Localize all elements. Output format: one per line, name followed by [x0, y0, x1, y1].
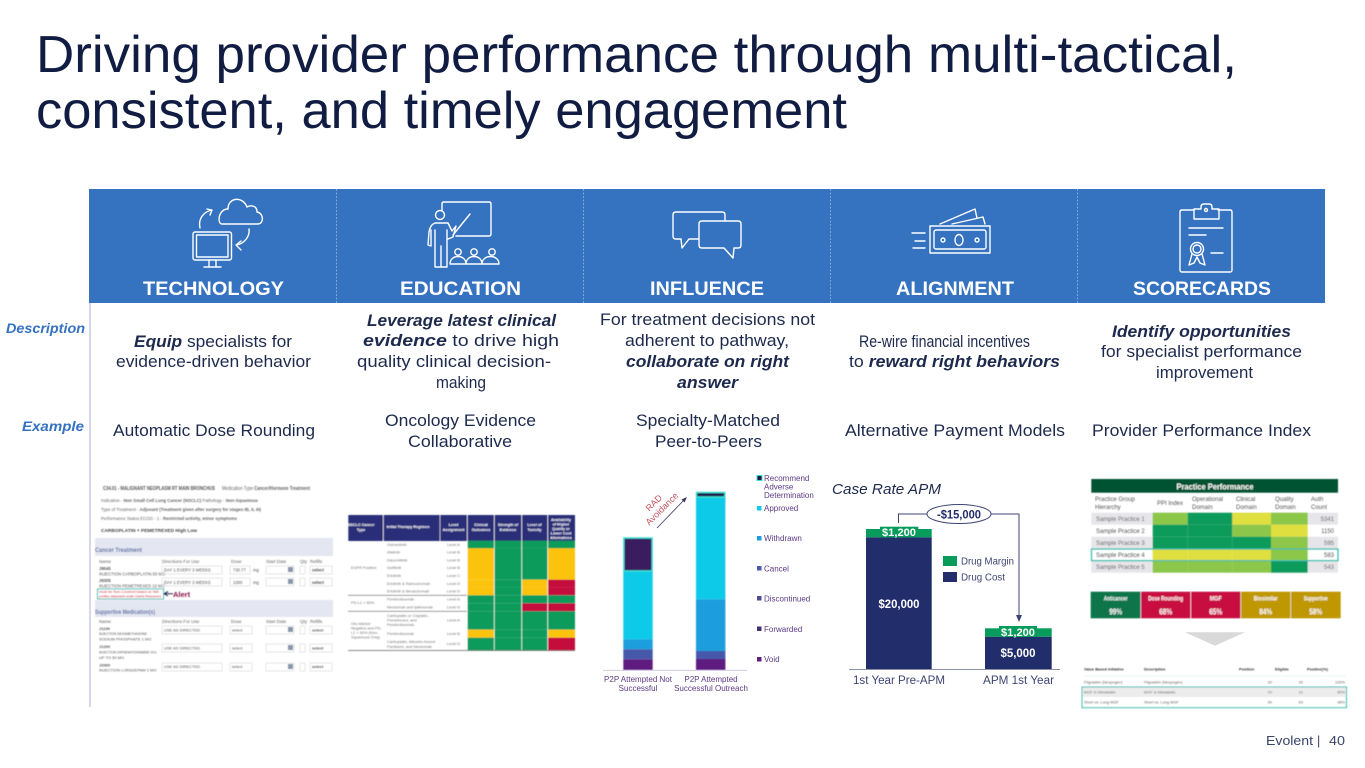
panel: dose rounding form: Name — [99, 619, 112, 624]
panel: dose rounding form: Qty — [300, 559, 308, 564]
panel: dose rounding form: DAY 1 EVERY 3 WEEKS — [164, 568, 211, 572]
panel: dose rounding form: Medication Type Cancer/Hormone Treatment — [222, 486, 310, 492]
row labels: Example — [22, 418, 84, 434]
axis labels — [853, 675, 1054, 687]
panel: dose rounding form: INJECTION LORAZEPAM 2 MG — [99, 668, 156, 672]
panel: dose rounding form: CARBOPLATIN + PEMETREXED High Low — [101, 528, 197, 534]
example titles: Specialty-Matched — [636, 411, 780, 430]
panel: dose rounding form: select — [232, 646, 243, 650]
footer: brand and page number: | — [1317, 734, 1320, 748]
example titles: Automatic Dose Rounding — [113, 421, 315, 440]
panel: oncology evidence table: Level of — [527, 523, 542, 527]
practice performance table: PPI Index — [1157, 501, 1183, 507]
value based initiative table: Eligible — [1275, 666, 1290, 672]
panel: dose rounding form: Start Date — [266, 619, 287, 624]
panel: dose rounding form: USE AS DIRECTED — [164, 628, 200, 632]
value based initiative table: Description — [1144, 666, 1166, 672]
panel: dose rounding form: select — [312, 664, 324, 669]
practice performance table: 1150 — [1321, 529, 1335, 535]
description: influence: For treatment decisions not — [600, 310, 815, 329]
practice performance table: Sample Practice 4 — [1096, 553, 1145, 559]
panel: oncology evidence table: Nivolumab and Ipilimumab — [387, 604, 433, 610]
panel: dose rounding form: J1200 — [99, 644, 111, 649]
panel: provider performance index — [1082, 479, 1346, 708]
panel: oncology evidence table: Alternatives — [550, 536, 572, 540]
column headings — [143, 279, 1271, 300]
value based initiative table: Short vs. Long MGF — [1084, 700, 1119, 704]
panel: oncology evidence table: Level C — [447, 573, 460, 578]
bar: not successful — [623, 538, 653, 670]
domain score tiles: Supportive — [1304, 596, 1328, 602]
domain score tiles: Biosimilar — [1254, 596, 1278, 602]
value based initiative table: MGF in Metastatic — [1144, 690, 1176, 694]
value based initiative table: Position — [1239, 666, 1255, 672]
practice performance table: Sample Practice 3 — [1096, 541, 1145, 547]
panel: oncology evidence table: Pembrolizumab — [387, 631, 414, 636]
footer: brand and page number: Evolent — [1266, 734, 1314, 748]
icon: education — [428, 202, 499, 267]
axis labels: APM 1st Year — [983, 675, 1054, 687]
axis labels: Successful — [619, 684, 658, 693]
practice performance table: Operational — [1192, 497, 1223, 503]
evidence heat cells — [467, 541, 575, 650]
panel: dose rounding form: USE AS DIRECTED — [164, 646, 200, 650]
panel: oncology evidence table: Gefitinib — [387, 565, 401, 570]
practice performance table: Count — [1311, 505, 1327, 511]
panel: oncology evidence table: Erlotinib & Bevacizumab — [387, 588, 429, 594]
panel: oncology evidence table: Paclitaxel, and Nivolumab — [387, 644, 432, 649]
practice performance table: Clinical — [1236, 497, 1255, 503]
icon: influence — [673, 212, 741, 258]
description: scorecards: Identify opportunities — [1112, 322, 1291, 341]
panel: dose rounding form: INJECTION DEXAMETHASONE — [99, 631, 147, 636]
panel: dose rounding form: Supportive Medication(s) — [95, 610, 155, 616]
header band — [89, 189, 1325, 303]
panel: oncology evidence table: Toxicity — [527, 528, 542, 532]
panel: oncology evidence table: Level D — [447, 581, 460, 586]
panel: oncology evidence table: Negative and PD- — [351, 626, 382, 630]
example titles: Oncology Evidence — [385, 411, 536, 430]
panel: dose rounding form: select — [312, 568, 324, 572]
RAD avoidance arrow: RAD — [644, 492, 664, 513]
description: influence: adherent to pathway, — [625, 331, 789, 350]
example titles: Peer-to-Peers — [655, 432, 762, 451]
panel: dose rounding form: 1000 — [233, 580, 243, 585]
panel: dose rounding form: Performance Status ECOG - 1 - Restricted activity, minor symptoms — [101, 516, 237, 522]
panel: oncology evidence table: NSCLC Cancer — [347, 523, 375, 527]
value based initiative table: Value Based Initiative — [1084, 666, 1125, 672]
legend — [757, 474, 814, 664]
domain score tiles: MGF — [1210, 596, 1222, 602]
practice performance table: Domain — [1275, 505, 1296, 511]
axis labels: 1st Year Pre-APM — [853, 675, 945, 687]
panel: oncology evidence table: Oto-Marker — [351, 621, 371, 626]
practice performance table: Sample Practice 1 — [1096, 517, 1145, 523]
value based initiative table: 30 — [1299, 680, 1304, 684]
example titles: Provider Performance Index — [1092, 421, 1312, 440]
practice performance table: Practice Performance — [1176, 482, 1254, 492]
column headings: SCORECARDS — [1133, 279, 1271, 300]
panel: dose rounding form: Name — [99, 559, 112, 564]
panel: dose rounding form: SODIUM PHOSPHATE 1 MG — [99, 636, 151, 642]
panel: oncology evidence table: Level D — [447, 604, 460, 610]
panel: dose rounding form: Refills — [310, 619, 323, 624]
panel: oncology evidence table: Lower Cost — [551, 532, 572, 536]
legend: Approved — [764, 504, 798, 513]
description: scorecards — [1101, 322, 1302, 382]
bar: APM year: $5,000 — [1000, 648, 1036, 660]
value based initiative table: Filgrastim (Neupogen) — [1084, 680, 1123, 684]
practice performance table: Practice Group — [1095, 497, 1136, 503]
practice performance table: Quality — [1275, 497, 1294, 503]
icon: alignment — [912, 209, 990, 253]
panel: dose rounding form: 730.77 — [233, 568, 246, 572]
savings callout arrow — [898, 504, 1022, 622]
panel: oncology evidence table: Outcomes — [472, 528, 490, 532]
bar: pre-APM — [866, 527, 932, 669]
panel: oncology evidence table: Carboplatin, Albumin-bound — [387, 639, 435, 644]
panel: oncology evidence table: Afatinib — [387, 550, 400, 554]
panel: dose rounding form: J9045 — [99, 566, 111, 571]
panel: dose rounding form: profiles statement under Useful Resources — [99, 594, 161, 598]
panel: dose rounding form: INJECTION DIPHENHYDRAMINE HCL — [99, 650, 158, 654]
RAD avoidance arrow: Avoidance — [644, 491, 680, 527]
panel: dose rounding form: DAY 1 EVERY 3 WEEKS — [164, 580, 211, 585]
panel: oncology evidence table: Pembrolizumab — [387, 622, 414, 627]
panel: oncology evidence table: Level A — [447, 542, 460, 547]
bar: APM year — [985, 626, 1052, 669]
panel: dose rounding form: Start Date — [266, 559, 287, 564]
column headings: ALIGNMENT — [896, 279, 1014, 300]
value based initiative table — [1082, 666, 1346, 708]
domain score tiles: Anticancer — [1104, 596, 1128, 602]
description: education: making — [436, 373, 486, 392]
panel: oncology evidence table: Level D — [447, 588, 460, 594]
panel: oncology evidence table: EGFR Positive — [351, 565, 377, 570]
panel: oncology evidence table: Assignment — [443, 528, 465, 532]
practice performance table: 583 — [1324, 553, 1335, 559]
panel: dose rounding form: J2060 — [99, 662, 111, 668]
panel: oncology evidence table: Level B — [447, 631, 460, 636]
panel: dose rounding form: must be Non-Covered based on NIA — [99, 590, 159, 594]
panel: dose rounding form: USE AS DIRECTED — [164, 664, 200, 669]
panel: oncology evidence table: Osimertinib — [387, 542, 407, 547]
description: technology: Equip specialists for — [134, 332, 292, 351]
description: education: quality clinical decision- — [357, 352, 551, 371]
legend: Recommend — [764, 474, 809, 483]
description: alignment: to reward right behaviors — [849, 352, 1060, 371]
description: education — [357, 311, 559, 392]
panel: oncology evidence table: Level B — [447, 550, 460, 554]
practice performance table: Auth — [1311, 497, 1323, 503]
panel: oncology evidence table: Level — [449, 523, 458, 527]
panel: oncology evidence table: Level A — [447, 618, 460, 622]
panel: oncology evidence table: Level B — [447, 558, 460, 562]
panel: case rate APM chart — [832, 481, 1060, 687]
legend: Drug Cost — [961, 572, 1005, 584]
legend: Adverse — [764, 482, 794, 492]
column headings: TECHNOLOGY — [143, 279, 284, 300]
practice performance table: Hierarchy — [1095, 505, 1121, 511]
panel: dose rounding form: J1100 — [99, 626, 111, 631]
panel: dose rounding form: Type of Treatment - Adjuvant (Treatment given after surgery for stages IB, II, III) — [101, 507, 261, 513]
practice performance table: Domain — [1192, 505, 1213, 511]
legend: Discontinued — [764, 594, 810, 604]
title — [36, 26, 1237, 140]
value based initiative table: 30 — [1268, 680, 1273, 684]
panel: dose rounding form: select — [232, 664, 243, 669]
description: influence — [600, 310, 815, 392]
panel: dose rounding form: Dose — [231, 559, 242, 564]
column headings: INFLUENCE — [650, 279, 764, 300]
panel: oncology evidence table: of Higher — [553, 522, 570, 526]
axis labels — [604, 675, 748, 693]
description: education: Leverage latest clinical — [367, 311, 557, 330]
panel: oncology evidence table: Type — [357, 528, 365, 532]
value based initiative table: MGF in Metastatic — [1084, 690, 1116, 694]
panel: oncology evidence table: Clinical — [474, 523, 488, 527]
panel: dose rounding form: INJECTION PEMETREXED 10 MG — [99, 584, 165, 588]
panel: dose rounding form: C34.01 - MALIGNANT NEOPLASM RT MAIN BRONCHUS — [103, 486, 216, 492]
panel: oncology evidence table: Erlotinib — [387, 573, 401, 578]
footer: brand and page number: 40 — [1329, 734, 1345, 748]
icon: scorecards — [1180, 204, 1232, 272]
panel: oncology evidence table: L1 > 50% (Non- — [351, 630, 379, 635]
panel: oncology evidence table: Level B — [447, 565, 460, 570]
description: technology — [116, 332, 311, 371]
practice performance table: Domain — [1236, 505, 1257, 511]
value based initiative table: Filgrastim (Neupogen) — [1144, 680, 1183, 684]
panel: oncology evidence table: Availability — [551, 518, 572, 522]
example titles: Collaborative — [408, 432, 512, 451]
footer: brand and page number — [1266, 734, 1345, 748]
panel: dose rounding form: Alert — [173, 590, 191, 599]
panel: oncology evidence table: Initial Therapy Regimen — [387, 525, 430, 529]
panel: dose rounding form: Indication - Non Small Cell Lung Cancer (NSCLC) Pathology - Non-Squamous — [101, 498, 258, 504]
bar: pre-APM: $20,000 — [878, 599, 920, 611]
value based initiative table: 31 — [1299, 690, 1303, 694]
legend: Void — [764, 655, 780, 664]
chart subtitle: Case Rate APM — [832, 481, 941, 498]
axis labels: P2P Attempted Not — [604, 675, 673, 684]
savings callout arrow: -$15,000 — [937, 510, 981, 522]
panel: dose rounding form: INJECTION CARBOPLATIN 50 MG — [99, 572, 165, 576]
value based initiative table: Positive(%) — [1307, 666, 1329, 672]
practice performance table: 5341 — [1321, 517, 1335, 523]
panel: peer-to-peer stacked bar chart — [603, 474, 814, 693]
domain score tiles: 68% — [1159, 606, 1173, 616]
practice performance table: Sample Practice 2 — [1096, 529, 1145, 535]
domain score tiles: Dose Rounding — [1148, 596, 1183, 602]
panel: dose rounding form: select — [312, 628, 324, 632]
row labels: Description — [6, 320, 85, 336]
domain score tiles: 65% — [1209, 606, 1223, 616]
legend: Cancel — [764, 564, 789, 574]
description: alignment: Re-wire financial incentives — [859, 332, 1030, 351]
panel: oncology evidence table: Squamous Only) — [351, 634, 381, 640]
description: influence: collaborate on right — [626, 352, 790, 371]
practice performance table: 543 — [1324, 565, 1335, 571]
value based initiative table: 100% — [1335, 680, 1346, 684]
column headings: EDUCATION — [400, 279, 521, 300]
legend — [943, 556, 1014, 584]
panel: dose rounding form: Qty — [300, 619, 308, 624]
description: influence: answer — [677, 373, 739, 392]
icon: technology — [193, 199, 262, 267]
drill-down triangle — [1185, 632, 1245, 646]
panel: dose rounding form: Dose — [231, 619, 242, 624]
panel: dose rounding form: Refills — [310, 559, 323, 564]
panel: dose rounding form: select — [312, 646, 324, 650]
value based initiative table: 20 — [1268, 690, 1273, 694]
description: scorecards: for specialist performance — [1101, 342, 1302, 361]
legend: Determination — [764, 491, 814, 500]
practice performance table — [1091, 479, 1338, 573]
panel: dose rounding form: UP TO 50 MG — [99, 655, 124, 660]
panel: oncology evidence table: Pemetrexed, and — [387, 618, 417, 622]
domain score tiles: 99% — [1109, 606, 1123, 616]
panel: dose rounding form: J9305 — [99, 578, 111, 583]
value based initiative table: Short vs. Long MGF — [1144, 700, 1179, 704]
legend: Drug Margin — [961, 556, 1014, 568]
legend: Withdrawn — [764, 534, 802, 543]
title: consistent, and timely engagement — [36, 82, 848, 140]
panel: dose rounding form: mg — [253, 580, 259, 585]
panel: dose rounding form: Directions For Use — [162, 559, 200, 564]
value based initiative table: 30 — [1268, 700, 1273, 704]
bar: pre-APM: $1,200 — [882, 527, 916, 539]
description: technology: evidence-driven behavior — [116, 352, 311, 371]
value based initiative table: 65% — [1337, 690, 1346, 694]
axis labels: Successful Outreach — [674, 684, 748, 693]
row labels — [6, 320, 85, 434]
left rule — [89, 303, 91, 707]
panel: oncology evidence table: PD-L1 > 50% — [351, 600, 375, 605]
title: Driving provider performance through multi-tactical, — [36, 26, 1237, 84]
axis labels: P2P Attempted — [684, 675, 738, 684]
panel: dose rounding form: select — [312, 580, 324, 585]
panel: oncology evidence table: Quality or — [552, 527, 570, 531]
panel: oncology evidence table: Pembrolizumab — [387, 596, 414, 602]
panel: dose rounding form: Cancer Treatment — [95, 548, 142, 554]
value based initiative table: 63 — [1299, 700, 1303, 704]
example titles — [113, 411, 1312, 451]
panel: oncology evidence table: Level D — [447, 641, 460, 646]
practice performance table: Sample Practice 5 — [1096, 565, 1145, 571]
bar: APM year: $1,200 — [1001, 627, 1035, 639]
description: scorecards: improvement — [1156, 363, 1253, 382]
legend: Forwarded — [764, 625, 802, 634]
domain score tiles: 84% — [1259, 606, 1273, 616]
panel: dose rounding form: mg — [253, 568, 259, 572]
panel: oncology evidence table: Carboplatin or Cisplatin, — [387, 613, 429, 618]
panel: oncology evidence table: Erlotinib & Ramucirumab — [387, 581, 430, 586]
panel: dose rounding form: Directions For Use — [162, 619, 200, 624]
description: education: evidence to drive high — [363, 331, 559, 350]
panel: oncology evidence table: Strength of — [498, 523, 519, 527]
domain score tiles — [1091, 592, 1341, 618]
panel: oncology evidence table — [347, 515, 575, 650]
panel: oncology evidence table: Level A — [447, 596, 460, 602]
panel: oncology evidence table: Dacomitinib — [387, 558, 407, 562]
panel: dose rounding form: select — [232, 628, 243, 632]
value based initiative table: 48% — [1337, 700, 1346, 704]
panel: dose rounding form — [95, 486, 333, 672]
example titles: Alternative Payment Models — [845, 421, 1065, 440]
practice performance table: 595 — [1324, 541, 1335, 547]
domain score tiles: 58% — [1309, 606, 1323, 616]
description: alignment — [849, 332, 1060, 371]
panel: oncology evidence table: Evidence — [500, 528, 516, 532]
bar: successful outreach — [696, 492, 725, 670]
